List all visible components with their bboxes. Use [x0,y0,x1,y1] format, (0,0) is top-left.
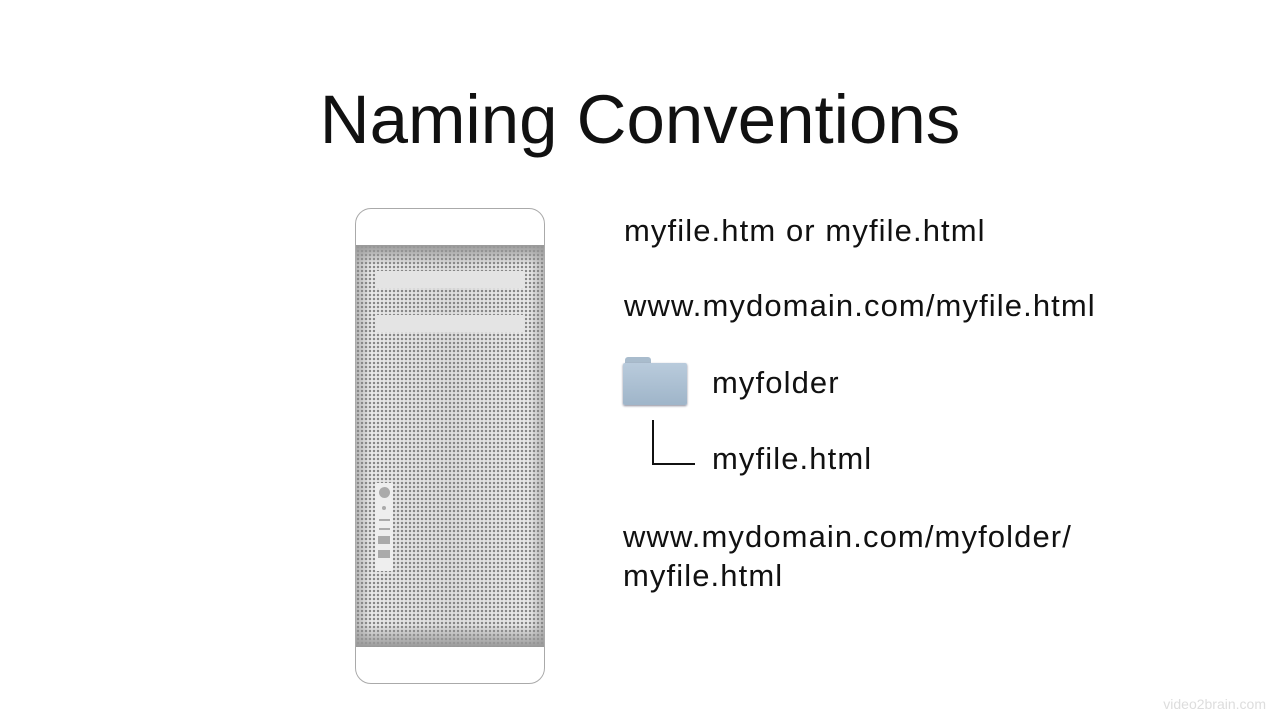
watermark: video2brain.com [1163,696,1266,712]
title: Naming Conventions [320,81,960,158]
drive bays [375,271,525,288]
grille [356,245,544,647]
text: folder url [623,519,1072,593]
connector line [652,420,695,465]
text: folder url: www.mydomain.com/myfolder/ [623,519,1072,554]
text: myfolder: myfolder [712,365,840,400]
icon: mac pro tower [355,208,545,684]
text: domain url: www.mydomain.com/myfile.html [624,288,1096,323]
text: file extensions: myfile.htm or myfile.html [624,213,986,248]
text: myfile.html: myfile.html [712,441,872,476]
text: folder url: myfile.html [623,558,783,593]
front panel ports [375,483,393,571]
icon: folder [622,357,688,408]
